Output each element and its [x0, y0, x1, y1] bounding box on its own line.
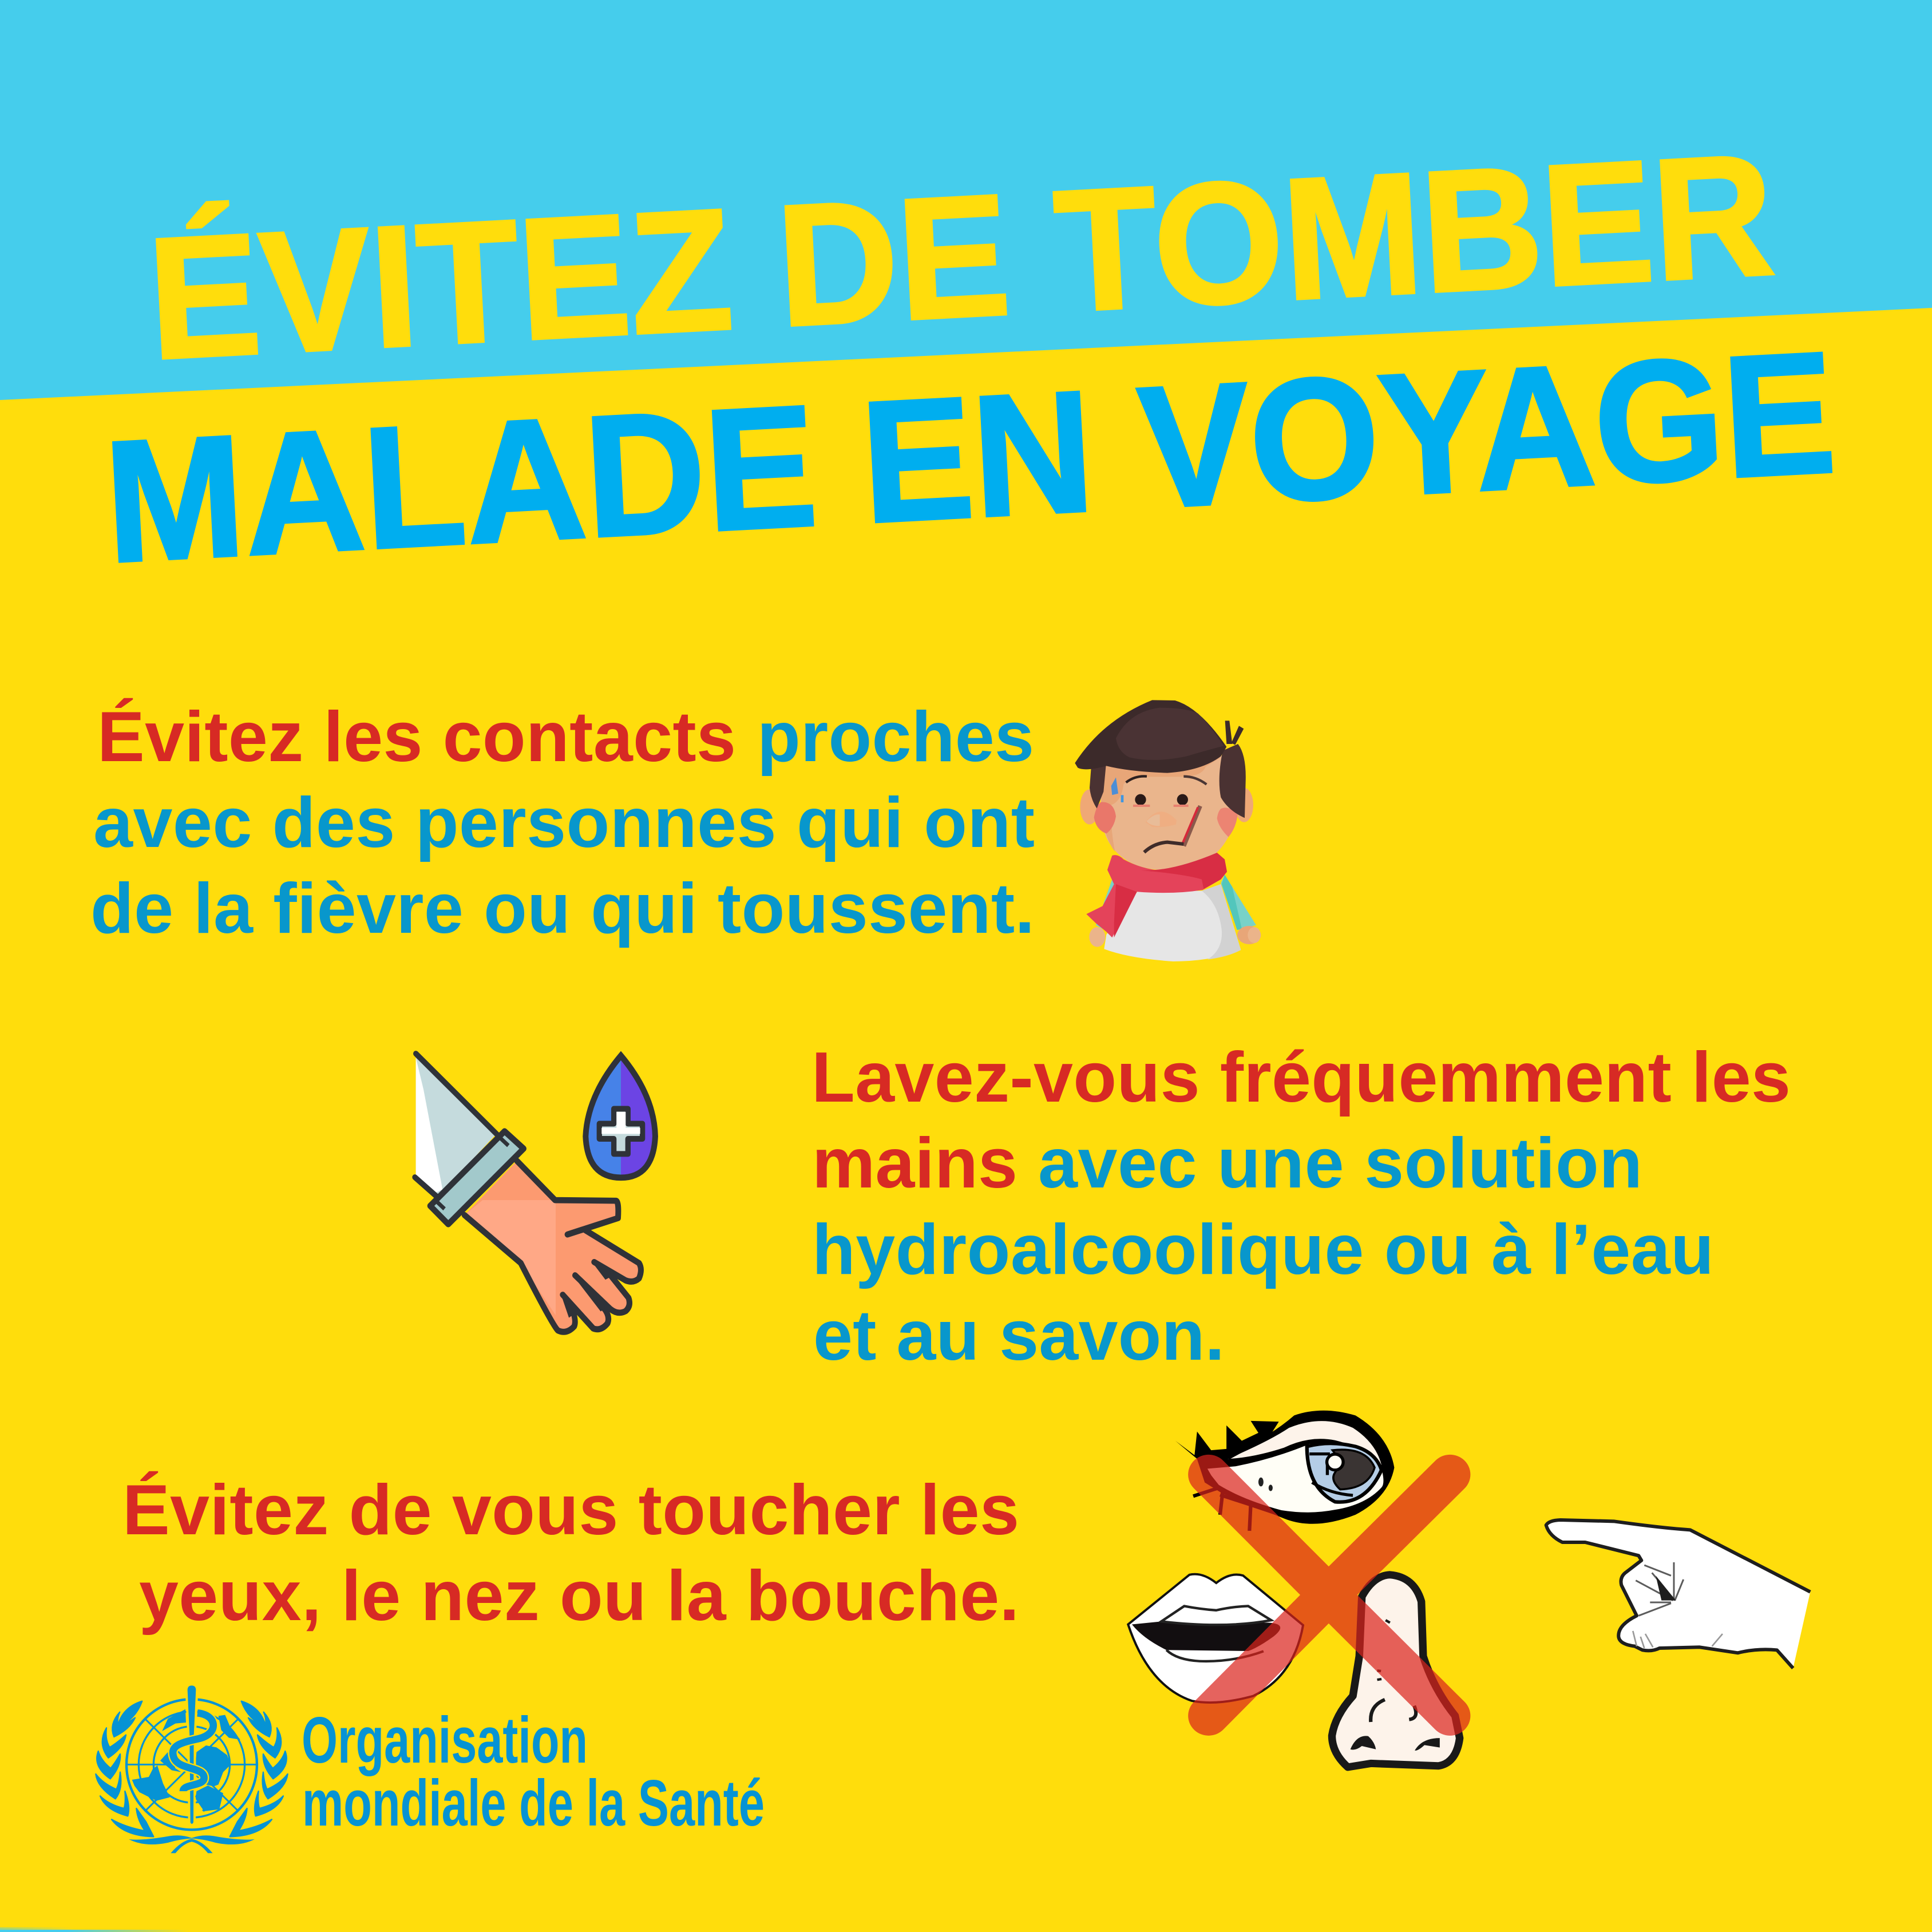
text block: avoid close contact: proches: [757, 698, 1034, 777]
text block: wash hands: avec une solution: [1038, 1124, 1642, 1203]
text block: do not touch face: [122, 1471, 1019, 1636]
logo: staff: [187, 1684, 197, 1825]
text block: wash hands: [811, 1038, 1791, 1375]
icon: nose: [1332, 1575, 1460, 1767]
icon: sick boy with thermometer: [1075, 700, 1261, 961]
title line 2: MALADE EN VOYAGE: [101, 315, 1839, 599]
logo text: Organisation mondiale de la Santé: mondiale de la Santé: [302, 1767, 765, 1840]
text block: avoid close contact: [90, 698, 1035, 948]
text block: wash hands: hydroalcoolique ou à l’eau: [812, 1210, 1714, 1289]
text block: do not touch face: yeux, le nez ou la bouche.: [139, 1557, 1019, 1636]
text block: wash hands: mains: [812, 1124, 1018, 1203]
icon: eye, mouth, nose crossed out: [1128, 1411, 1460, 1767]
text block: do not touch face: Évitez de vous toucher les: [122, 1471, 1019, 1550]
logo: ribbon: [129, 1835, 255, 1853]
icon: pointing hand: [1546, 1520, 1810, 1668]
background: blue diagonal header band: [0, 0, 1932, 400]
text block: avoid close contact: Évitez les contacts: [97, 698, 736, 777]
logo: continents: [196, 1745, 231, 1787]
logo: WHO emblem: [96, 1684, 288, 1853]
logo: UN globe grid: [126, 1699, 257, 1830]
text block: avoid close contact: de la fièvre ou qui toussent.: [90, 869, 1035, 948]
icon: sanitizer drop with plus: [585, 1056, 655, 1178]
logo text: Organisation mondiale de la Santé: Organisation: [302, 1704, 588, 1777]
title line 1: ÉVITEZ DE TOMBER: [144, 118, 1778, 395]
background: faint blue sliver at the bottom edge: [0, 1927, 189, 1932]
text block: wash hands: et au savon.: [813, 1296, 1225, 1375]
logo: serpent: [173, 1713, 213, 1811]
icon: hand with cuff: [415, 1054, 641, 1332]
text block: wash hands: Lavez-vous fréquemment les: [811, 1038, 1791, 1117]
icon: eye: [1175, 1411, 1394, 1531]
logo: right laurel: [230, 1701, 288, 1836]
icon: mouth: [1128, 1574, 1303, 1703]
text block: avoid close contact: avec des personnes qui ont: [93, 783, 1035, 862]
icon: red X overlay: [1209, 1475, 1450, 1716]
logo text: Organisation mondiale de la Santé: [302, 1704, 765, 1840]
logo: left laurel: [96, 1701, 153, 1836]
